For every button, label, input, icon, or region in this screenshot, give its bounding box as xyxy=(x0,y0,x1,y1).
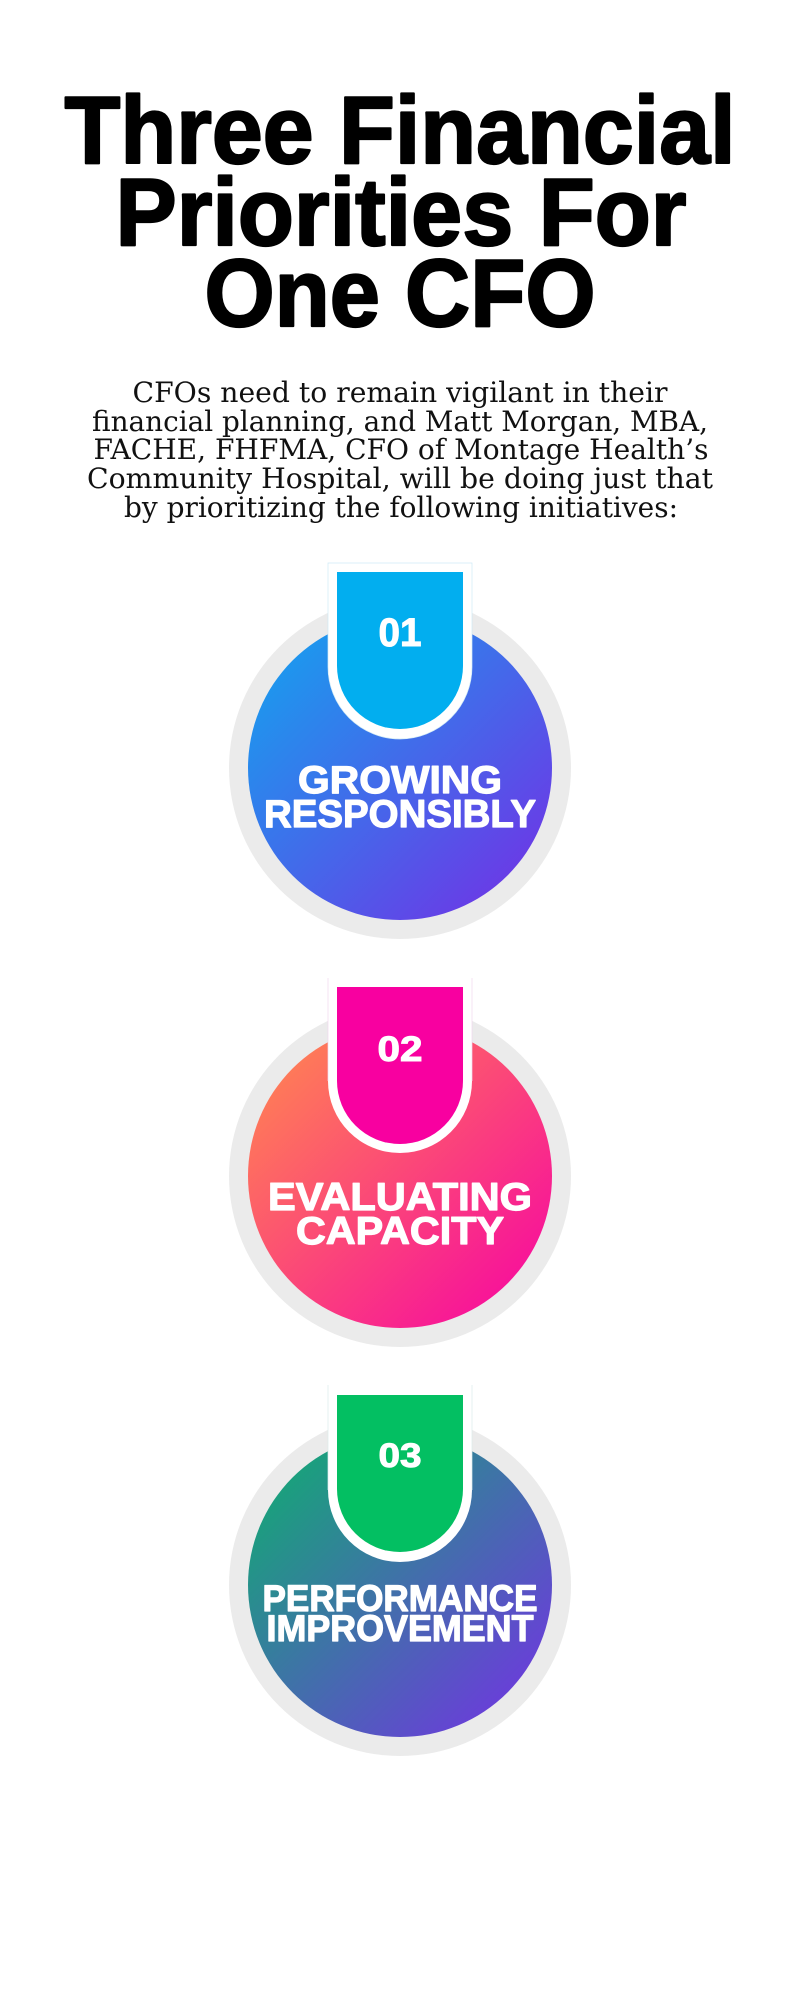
heading xyxy=(262,1578,538,1649)
heading: IMPROVEMENT xyxy=(266,1608,534,1649)
heading: GROWING xyxy=(298,759,502,802)
intro text: Community Hospital, will be doing just that xyxy=(87,462,714,495)
title: One CFO xyxy=(204,240,596,347)
intro text: FACHE, FHFMA, CFO of Montage Health’s xyxy=(94,433,708,466)
badge 02: 02 xyxy=(378,1030,422,1069)
panel: priority 01 growing responsibly xyxy=(229,563,571,939)
badge 02 xyxy=(328,978,472,1153)
gradient circle xyxy=(248,1433,552,1737)
outer grey ring xyxy=(229,597,571,939)
intro text: CFOs need to remain vigilant in their xyxy=(132,376,668,409)
intro text xyxy=(87,376,714,524)
panel: priority 02 evaluating capacity xyxy=(229,978,571,1347)
heading: RESPONSIBLY xyxy=(264,793,536,836)
gradient circle xyxy=(248,1024,552,1328)
heading: CAPACITY xyxy=(296,1210,504,1253)
title xyxy=(64,77,736,347)
intro text: by prioritizing the following initiatives: xyxy=(124,491,678,524)
heading: EVALUATING xyxy=(268,1176,532,1219)
title: Priorities For xyxy=(116,159,686,266)
outer grey ring xyxy=(229,1414,571,1756)
outer grey ring xyxy=(229,1005,571,1347)
badge 03 xyxy=(328,1385,472,1562)
heading: PERFORMANCE xyxy=(262,1578,538,1619)
heading xyxy=(264,759,536,836)
badge 01: 01 xyxy=(378,611,422,655)
intro text: financial planning, and Matt Morgan, MBA, xyxy=(92,405,708,438)
gradient circle xyxy=(248,616,552,920)
badge 01 xyxy=(328,563,472,739)
title: Three Financial xyxy=(64,77,736,184)
heading xyxy=(268,1176,532,1253)
badge 03: 03 xyxy=(378,1437,422,1475)
panel: priority 03 performance improvement xyxy=(229,1385,571,1756)
